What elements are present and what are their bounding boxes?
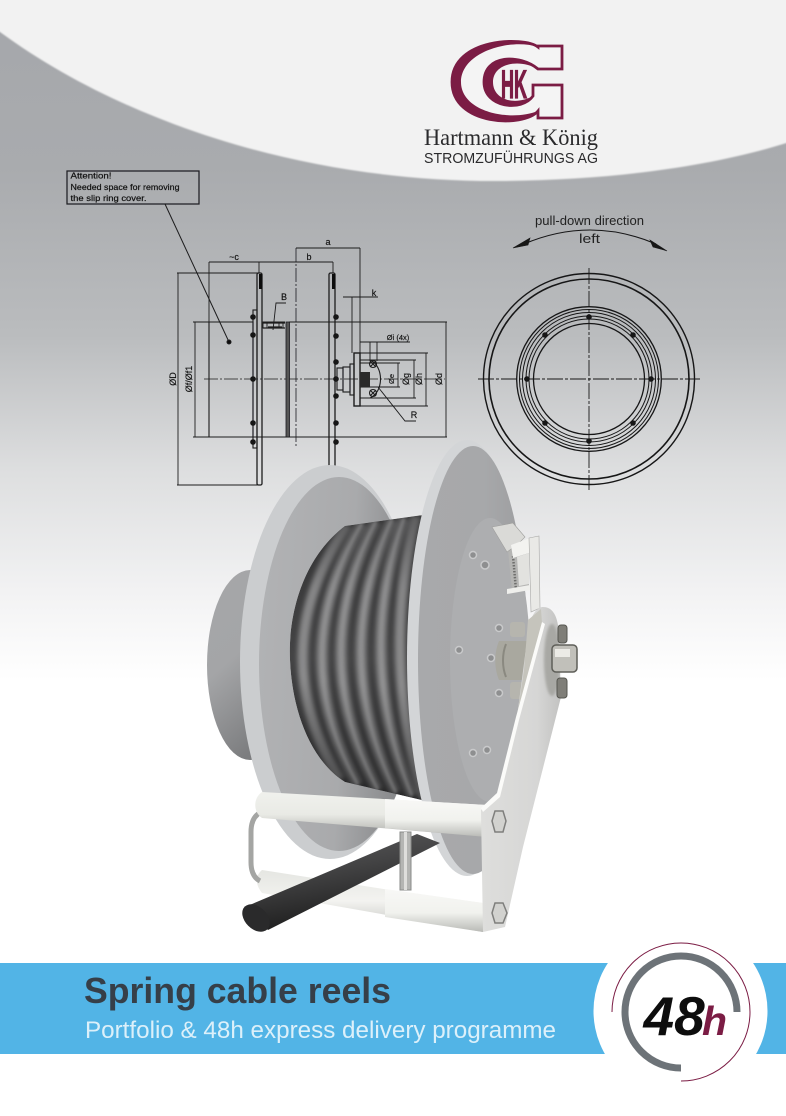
direction label left: left (579, 231, 600, 246)
cable drum with wound coils (290, 514, 430, 802)
attention note box: Needed space for removing (70, 182, 180, 192)
centre lines (204, 248, 445, 448)
direction arrow (513, 230, 667, 251)
left flange (240, 465, 420, 859)
48h badge (594, 924, 768, 1098)
title banner (0, 963, 786, 1054)
attention note box: the slip ring cover. (70, 193, 146, 203)
dimension labels: Øh (414, 373, 424, 385)
attention note box: Attention! (70, 170, 112, 180)
crosshair centre lines (478, 268, 700, 490)
banner title: Spring cable reels (84, 970, 391, 1011)
technical drawing: front view (478, 213, 700, 490)
lower roller (257, 870, 483, 932)
ring bolts (524, 314, 654, 444)
left hub cover (207, 570, 293, 760)
dimension labels: ØD (168, 372, 178, 386)
dimension labels: Øg (401, 373, 411, 385)
connector cluster (552, 625, 577, 698)
company name: Hartmann & König (424, 125, 598, 150)
vertical guide bar (400, 832, 411, 890)
dimension labels: Øf/Øf1 (184, 366, 194, 392)
mounting side plate (481, 607, 561, 932)
plate bolts (492, 811, 507, 923)
cable reel product illustration (207, 440, 577, 937)
dimension labels: R (411, 410, 418, 420)
banner subtitle: Portfolio & 48h express delivery programme (85, 1017, 556, 1044)
thin maroon arc (612, 943, 750, 1081)
dimension lines (177, 248, 447, 485)
pull-down direction label: pull-down direction (535, 213, 644, 228)
attention note box (67, 170, 199, 204)
dimension labels: b (306, 252, 312, 262)
upper roller (255, 792, 487, 837)
inner rings (517, 307, 661, 451)
dimension labels: k (372, 288, 377, 298)
dimension labels: a (325, 237, 331, 247)
hub and nuts (495, 622, 527, 699)
right flange (329, 273, 335, 473)
left flange and cover (209, 273, 262, 485)
dimension labels: B (281, 292, 287, 302)
dimension labels: ~c (229, 252, 239, 262)
technical drawing: side view (67, 170, 447, 485)
side guide loop (251, 812, 261, 881)
h label: h (702, 998, 727, 1044)
grey progress arc (625, 956, 737, 1068)
dimension labels: Øe (387, 374, 396, 384)
latch bracket (492, 523, 540, 612)
flange bolts (456, 552, 502, 756)
dimension labels: Øi (4x) (387, 333, 410, 342)
company logo (452, 41, 562, 121)
company logo: HK (501, 63, 527, 107)
48 label: 48 (642, 985, 705, 1047)
slip ring hub (337, 353, 380, 406)
drum section (263, 322, 290, 437)
outgoing cable (237, 834, 440, 937)
top light curved header area (0, 0, 786, 181)
company subtitle: STROMZUFÜHRUNGS AG (424, 149, 598, 167)
outer rings (484, 274, 694, 484)
dimension labels: Ød (434, 373, 444, 385)
dimension labels (168, 237, 444, 420)
right flange (407, 440, 530, 876)
leader line from note (165, 204, 231, 344)
bolts on flanges (250, 314, 339, 445)
